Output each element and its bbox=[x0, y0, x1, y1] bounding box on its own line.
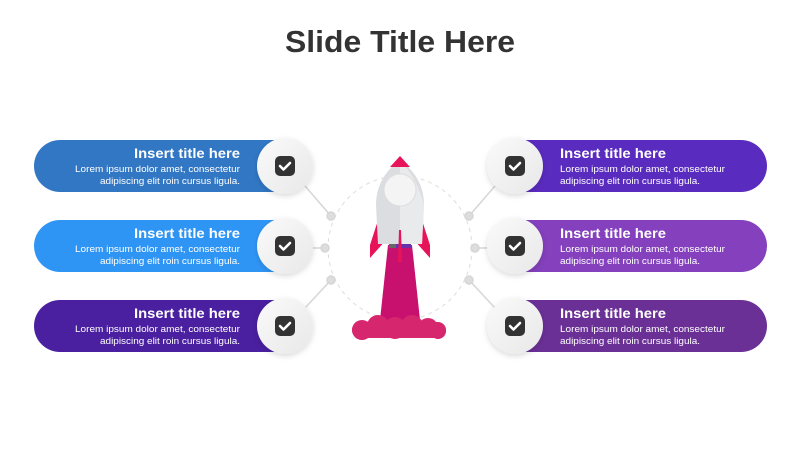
item: left 3 bbox=[34, 298, 313, 354]
item: left 1: Insert title here bbox=[134, 146, 241, 161]
item: left 2 bbox=[34, 218, 313, 274]
item: left 2: adipiscing elit roin cursus ligula. bbox=[100, 256, 240, 267]
item: right 1: Insert title here bbox=[560, 146, 667, 161]
item: right 3 bbox=[487, 298, 767, 354]
item: left 1: adipiscing elit roin cursus ligula. bbox=[100, 176, 240, 187]
item: left 3: Insert title here bbox=[134, 306, 241, 321]
item: left 3: Lorem ipsum dolor amet, consectetur bbox=[75, 324, 240, 335]
title: Slide Title Here bbox=[285, 24, 515, 59]
item: right 2: Lorem ipsum dolor amet, consectetur bbox=[560, 244, 725, 255]
connectors bbox=[305, 186, 495, 308]
item: right 1: Lorem ipsum dolor amet, consectetur bbox=[560, 164, 725, 175]
item: right 2: Insert title here bbox=[560, 226, 667, 241]
item: right 1: adipiscing elit roin cursus ligula. bbox=[560, 176, 700, 187]
item: left 3: adipiscing elit roin cursus ligula. bbox=[100, 336, 240, 347]
item: left 1: Lorem ipsum dolor amet, consectetur bbox=[75, 164, 240, 175]
item: right 3: Lorem ipsum dolor amet, consectetur bbox=[560, 324, 725, 335]
item: left 2: Insert title here bbox=[134, 226, 241, 241]
item: right 2: adipiscing elit roin cursus ligula. bbox=[560, 256, 700, 267]
item: right 1 bbox=[487, 138, 767, 194]
item: right 2 bbox=[487, 218, 767, 274]
item: left 1 bbox=[34, 138, 313, 194]
item: left 2: Lorem ipsum dolor amet, consectetur bbox=[75, 244, 240, 255]
item: right 3: Insert title here bbox=[560, 306, 667, 321]
item: right 3: adipiscing elit roin cursus ligula. bbox=[560, 336, 700, 347]
dashed circle bbox=[328, 176, 472, 320]
icon: rocket bbox=[352, 156, 446, 340]
